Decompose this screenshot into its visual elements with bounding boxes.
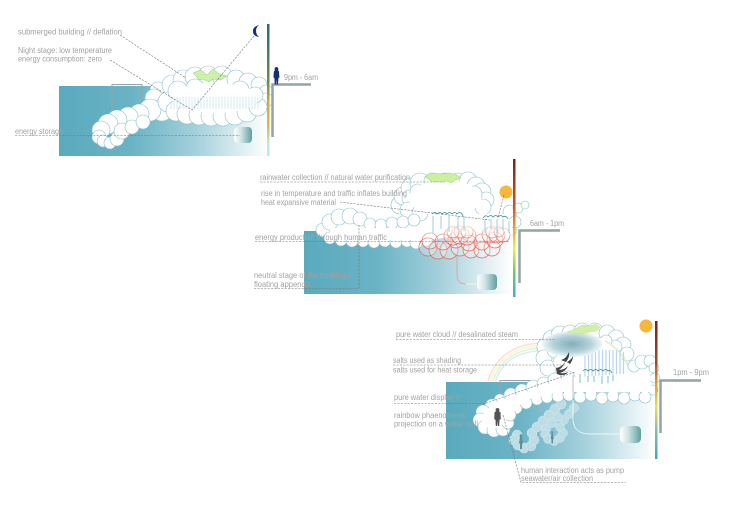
label: deflation: submerged building // deflation [18, 28, 122, 36]
label: neutral stage: neutral stage of the building // [254, 271, 353, 280]
label: projection: projection on a water wall [394, 420, 478, 428]
time: 9pm - 6am: 9pm - 6am [284, 73, 318, 82]
panel: night stage [15, 24, 318, 156]
rainbow inner [605, 341, 629, 368]
lower band cloud [473, 355, 660, 437]
water tank night [59, 86, 268, 156]
frame [500, 380, 531, 400]
label: heat expansive: heat expansive material [261, 198, 336, 207]
icon: salts [556, 352, 573, 375]
icon: moon [253, 25, 259, 37]
cloud building deflated [92, 66, 273, 149]
submerged frame [112, 84, 142, 112]
label: energy storage: energy storage [15, 127, 63, 136]
panel: afternoon stage [393, 320, 709, 483]
energy tank [234, 127, 252, 143]
pole [267, 24, 270, 156]
pipe end [466, 283, 477, 285]
upper cloud [536, 323, 634, 376]
pipe [573, 400, 620, 434]
ghost pump appendages [509, 399, 578, 453]
leader lines [15, 35, 254, 136]
label: human interaction: human interaction acts as pump [521, 466, 624, 475]
cloud interior [560, 338, 625, 372]
icon: sun [500, 186, 512, 198]
red heated cloud [419, 226, 510, 259]
panel: morning stage [254, 159, 564, 297]
red pipe [457, 255, 477, 284]
label: energy consumption: energy consumption: zero [18, 54, 102, 64]
upper cloud core [409, 180, 481, 216]
icon: person [273, 67, 279, 84]
white body mask [330, 214, 514, 240]
leader lines [254, 182, 510, 288]
energy tank [477, 274, 497, 290]
time: 1pm - 9pm: 1pm - 9pm [673, 368, 709, 377]
upper cloud [391, 172, 494, 221]
ledge [660, 380, 701, 433]
green roof [193, 69, 227, 82]
rainbow [488, 343, 545, 381]
energy tank [620, 426, 641, 443]
ledge [272, 84, 311, 137]
pole [655, 321, 658, 459]
teal fringe [583, 370, 612, 373]
water tank morning [304, 231, 512, 294]
leader lines [393, 340, 626, 482]
rain lines [171, 97, 258, 109]
label: rainwater: rainwater collection // natural water purification [260, 173, 410, 182]
label: salts shading: salts used as shading [393, 356, 461, 365]
ledge [520, 230, 560, 283]
rain stripes [585, 350, 624, 378]
icon: sun [640, 320, 652, 332]
label: pure water display: pure water display // [394, 393, 461, 402]
inflated teal fringe [432, 212, 508, 219]
label: rise in temperature: rise in temperature and traffic inflates building [261, 189, 407, 198]
steam cloud [542, 331, 602, 357]
green roof [567, 324, 600, 334]
cloud core [171, 83, 259, 113]
water tank afternoon [446, 382, 656, 459]
hanging strands [580, 374, 613, 384]
label: night stage: Night stage: low temperature [18, 46, 112, 55]
pole [513, 159, 516, 297]
icon: ghost persons [519, 431, 554, 449]
icon: person [494, 408, 501, 426]
time: 6am - 1pm: 6am - 1pm [530, 219, 564, 228]
label: rainbow: rainbow phaenomena [394, 411, 466, 420]
white body mask [482, 372, 652, 428]
label: seawater: seawater/air collection [521, 474, 593, 483]
label: energy production: energy production through human traffic [255, 233, 387, 242]
label: floating appendix: floating appendix [254, 280, 311, 289]
long lower cloud [316, 201, 529, 249]
fade over red cloud [420, 222, 512, 240]
label: pure water cloud: pure water cloud // desalinated steam [396, 330, 518, 339]
label: salts heat: salts used for heat storage [393, 366, 477, 374]
hanging strands [433, 216, 509, 233]
pipe upper [572, 375, 574, 400]
green roof [425, 173, 461, 183]
